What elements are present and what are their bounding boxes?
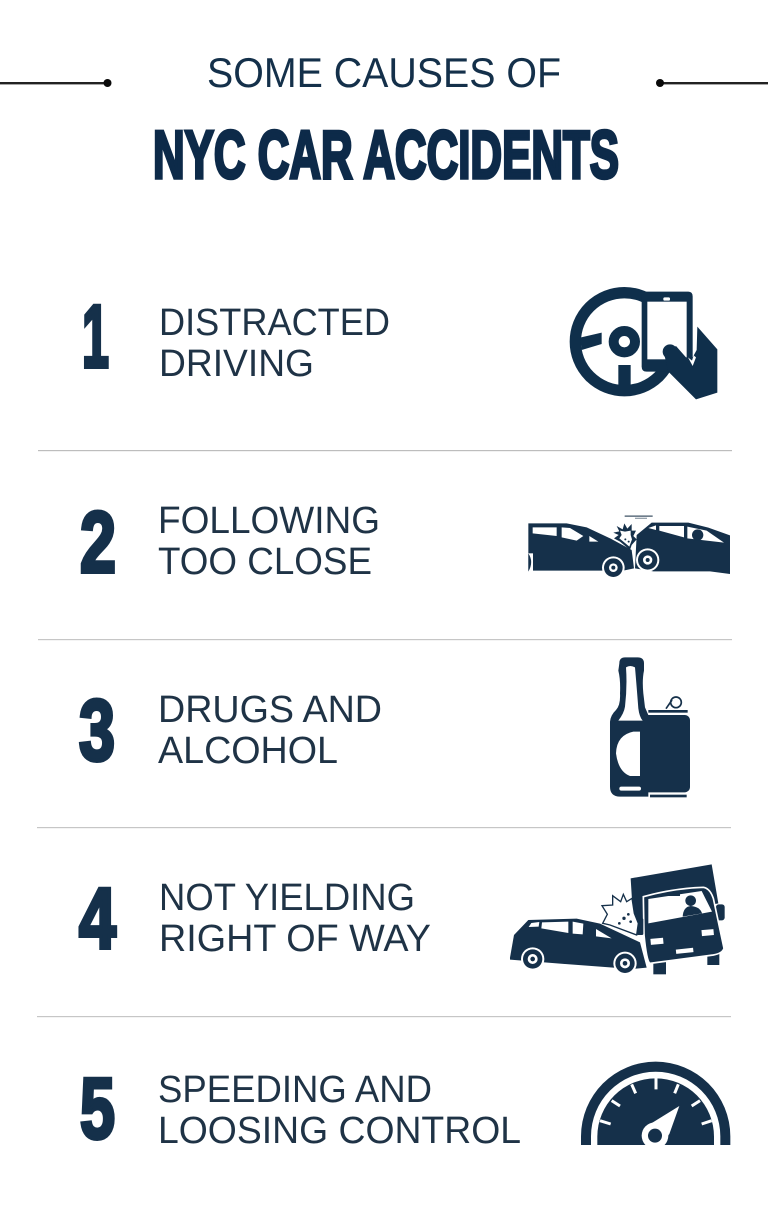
number 3: 3 xyxy=(79,683,115,779)
divider xyxy=(37,827,731,828)
label: DISTRACTED xyxy=(159,302,390,344)
subtitle: SOME CAUSES OF xyxy=(207,49,561,96)
icon: steering wheel and phone xyxy=(575,292,717,399)
label: FOLLOWING xyxy=(158,500,380,542)
label: NOT YIELDING xyxy=(159,877,415,919)
icon: bottle and can xyxy=(610,657,690,797)
right header rule xyxy=(656,79,768,87)
label: SPEEDING AND xyxy=(158,1069,432,1111)
cause 3: drugs and alcohol xyxy=(79,657,690,797)
divider xyxy=(38,450,732,451)
divider xyxy=(38,639,732,640)
label: LOOSING CONTROL xyxy=(158,1110,521,1152)
cause 4: not yielding right of way xyxy=(79,864,725,975)
number 5: 5 xyxy=(80,1061,115,1157)
cause 1: distracted driving xyxy=(82,286,717,399)
header xyxy=(0,49,768,193)
label: RIGHT OF WAY xyxy=(159,918,431,960)
cause 2: following too close xyxy=(80,495,730,591)
icon: speedometer xyxy=(581,1062,730,1149)
icon: rear-end collision xyxy=(528,515,730,579)
label: DRIVING xyxy=(159,343,314,385)
label: ALCOHOL xyxy=(158,730,338,772)
label: TOO CLOSE xyxy=(158,541,372,583)
number 4: 4 xyxy=(79,871,116,967)
icon: car hitting truck xyxy=(510,864,725,975)
left header rule xyxy=(0,79,112,87)
divider xyxy=(37,1016,731,1017)
cause 5: speeding and loosing control xyxy=(80,1061,730,1157)
number 2: 2 xyxy=(80,495,116,591)
label: DRUGS AND xyxy=(158,689,382,731)
number 1: 1 xyxy=(82,286,109,386)
